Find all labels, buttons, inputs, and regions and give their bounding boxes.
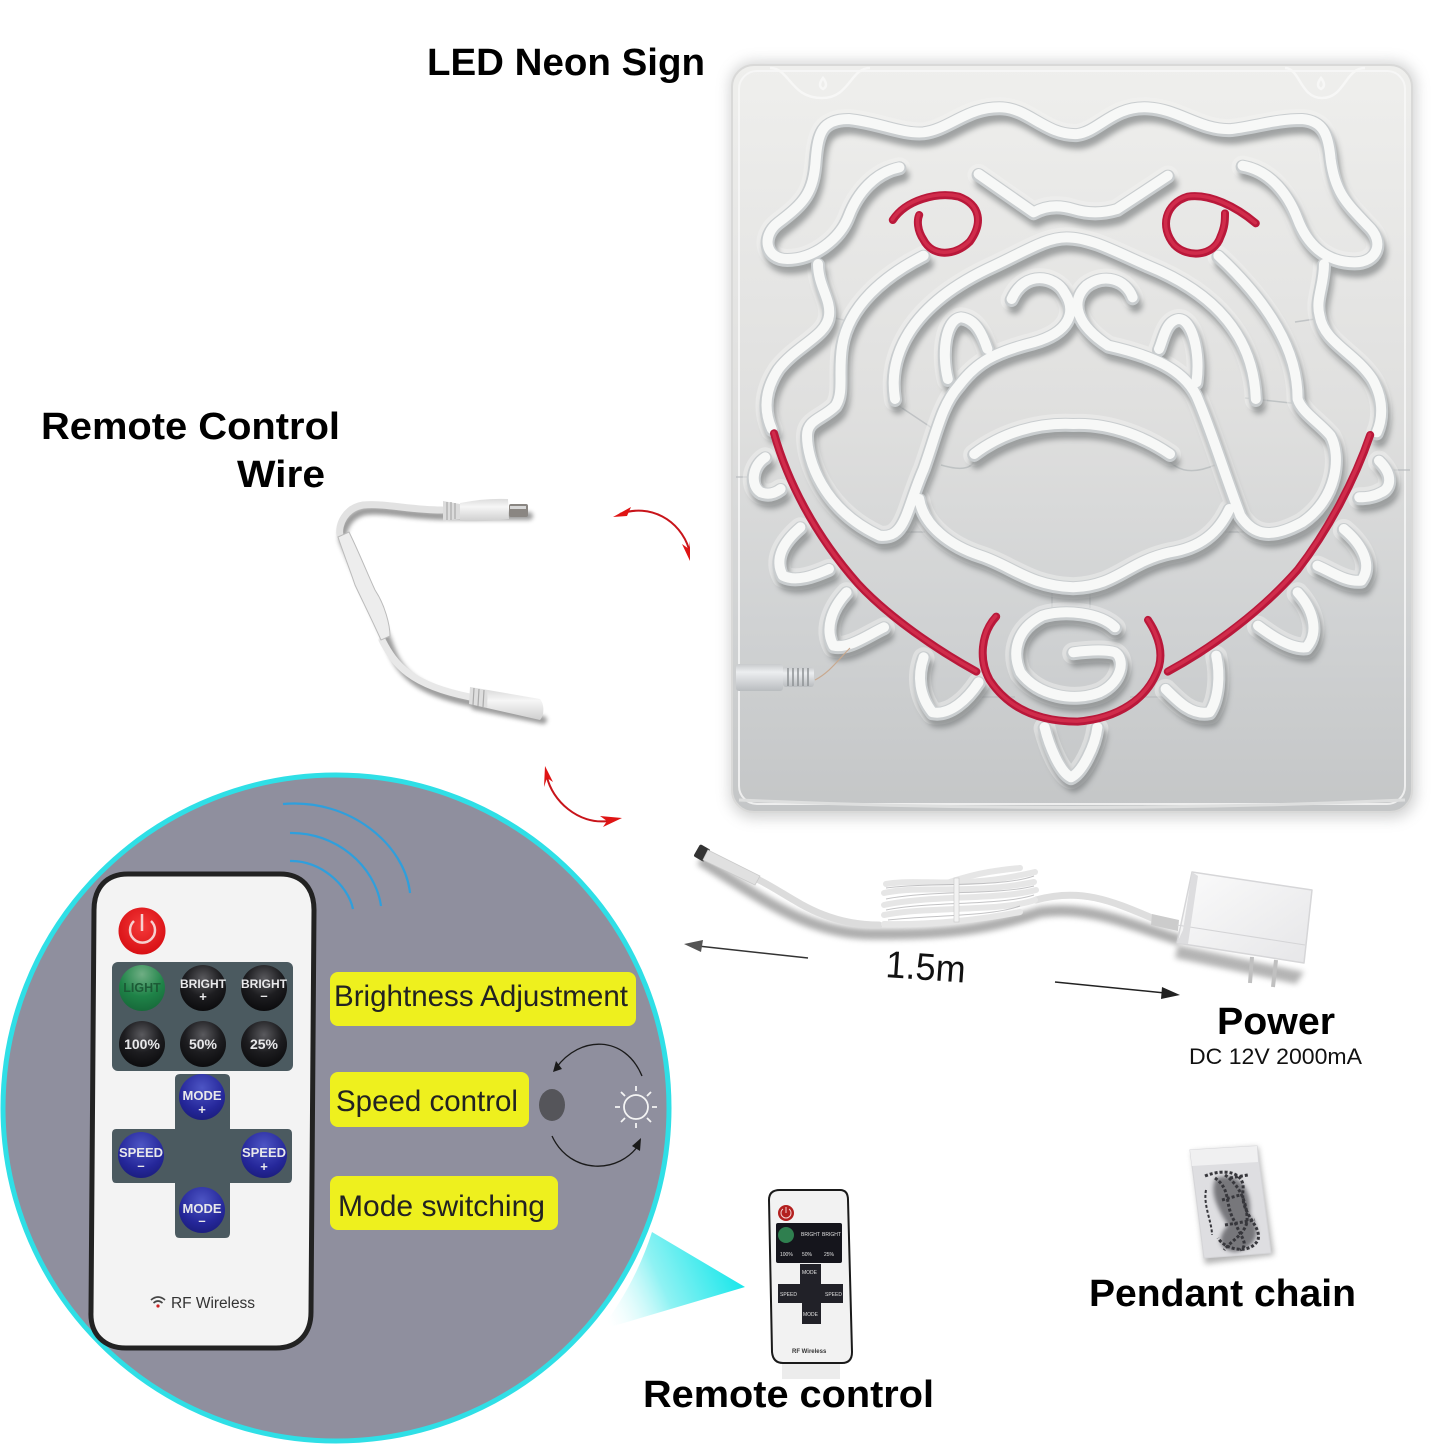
keypad: mode and speed: + <box>260 1159 268 1174</box>
label: Speed control <box>330 1072 529 1127</box>
label: Brightness Adjustment: Brightness Adjustment <box>334 980 629 1013</box>
keypad: brightness <box>112 962 293 1071</box>
connector <box>736 648 850 691</box>
clear acrylic bridges <box>736 318 1410 697</box>
text: Power: Power <box>1217 1001 1335 1043</box>
small remote photo <box>769 1190 852 1379</box>
keypad: mode and speed: MODE <box>182 1088 222 1103</box>
white neon tube <box>754 107 1389 778</box>
small remote photo: MODE <box>802 1270 818 1276</box>
icon: speed cycle <box>539 1044 657 1166</box>
neon shadow <box>757 115 1392 785</box>
power adapter with cable <box>693 844 1312 987</box>
small remote photo: SPEED <box>825 1292 842 1298</box>
small remote photo: 25% <box>824 1252 835 1258</box>
keypad: mode and speed: + <box>198 1102 206 1117</box>
arrow: length right <box>1055 982 1180 999</box>
heading: Remote Control Wire <box>41 406 340 496</box>
heading: Remote Control Wire: Wire <box>237 454 325 496</box>
keypad: mode and speed: – <box>137 1158 145 1173</box>
small remote photo: RF Wireless <box>792 1349 827 1355</box>
small remote photo: BRIGHT <box>801 1232 820 1238</box>
small remote photo: 100% <box>780 1252 793 1258</box>
label: Speed control: Speed control <box>336 1085 518 1118</box>
icon: signal arcs <box>283 803 410 909</box>
small remote photo: MODE <box>803 1312 819 1318</box>
text: Remote control: Remote control <box>643 1374 934 1416</box>
small remote photo: BRIGHT <box>822 1232 841 1238</box>
arrow: remote to wire <box>544 766 622 827</box>
keypad: brightness: BRIGHT <box>241 977 288 991</box>
RF Wireless label: RF Wireless <box>171 1295 255 1312</box>
panel: neon sign on acrylic plate <box>730 62 1416 818</box>
pendant chain bag <box>1190 1146 1274 1264</box>
keypad: brightness: 25% <box>250 1036 279 1052</box>
keypad: mode and speed: MODE <box>182 1201 222 1216</box>
red neon tube <box>774 195 1370 722</box>
label: Brightness Adjustment <box>330 972 636 1026</box>
keypad: mode and speed: SPEED <box>242 1145 286 1160</box>
keypad: mode and speed: – <box>198 1213 206 1228</box>
text: Pendant chain: Pendant chain <box>1089 1273 1356 1315</box>
panel: remote detail circle <box>3 775 745 1441</box>
small remote photo: 50% <box>802 1252 813 1258</box>
keypad: brightness: + <box>199 989 207 1004</box>
text: cable length: 1.5m <box>884 944 967 992</box>
keypad: brightness: 50% <box>189 1036 218 1052</box>
text: Power <box>1189 1001 1362 1069</box>
mount tabs <box>770 68 1365 98</box>
power button <box>118 908 166 954</box>
keypad: mode and speed: SPEED <box>119 1145 163 1160</box>
callout wedge <box>600 1232 745 1330</box>
label: Mode switching <box>330 1176 558 1230</box>
label: Mode switching: Mode switching <box>338 1190 545 1223</box>
keypad: mode and speed <box>112 1074 292 1238</box>
arrow: length left <box>684 940 808 958</box>
large remote <box>91 874 314 1348</box>
keypad: brightness: 100% <box>124 1036 160 1052</box>
keypad: brightness: – <box>260 988 268 1003</box>
clear tube backing <box>754 108 1389 778</box>
heading: Remote Control Wire: Remote Control <box>41 406 340 448</box>
arrow: wire to sign <box>613 507 690 561</box>
text: Power: DC 12V 2000mA <box>1189 1044 1362 1069</box>
keypad: brightness: LIGHT <box>123 981 161 995</box>
title: LED Neon Sign: LED Neon Sign <box>427 42 705 84</box>
keypad: brightness: BRIGHT <box>180 977 227 991</box>
remote control wire <box>338 499 543 720</box>
small remote photo: SPEED <box>780 1292 797 1298</box>
